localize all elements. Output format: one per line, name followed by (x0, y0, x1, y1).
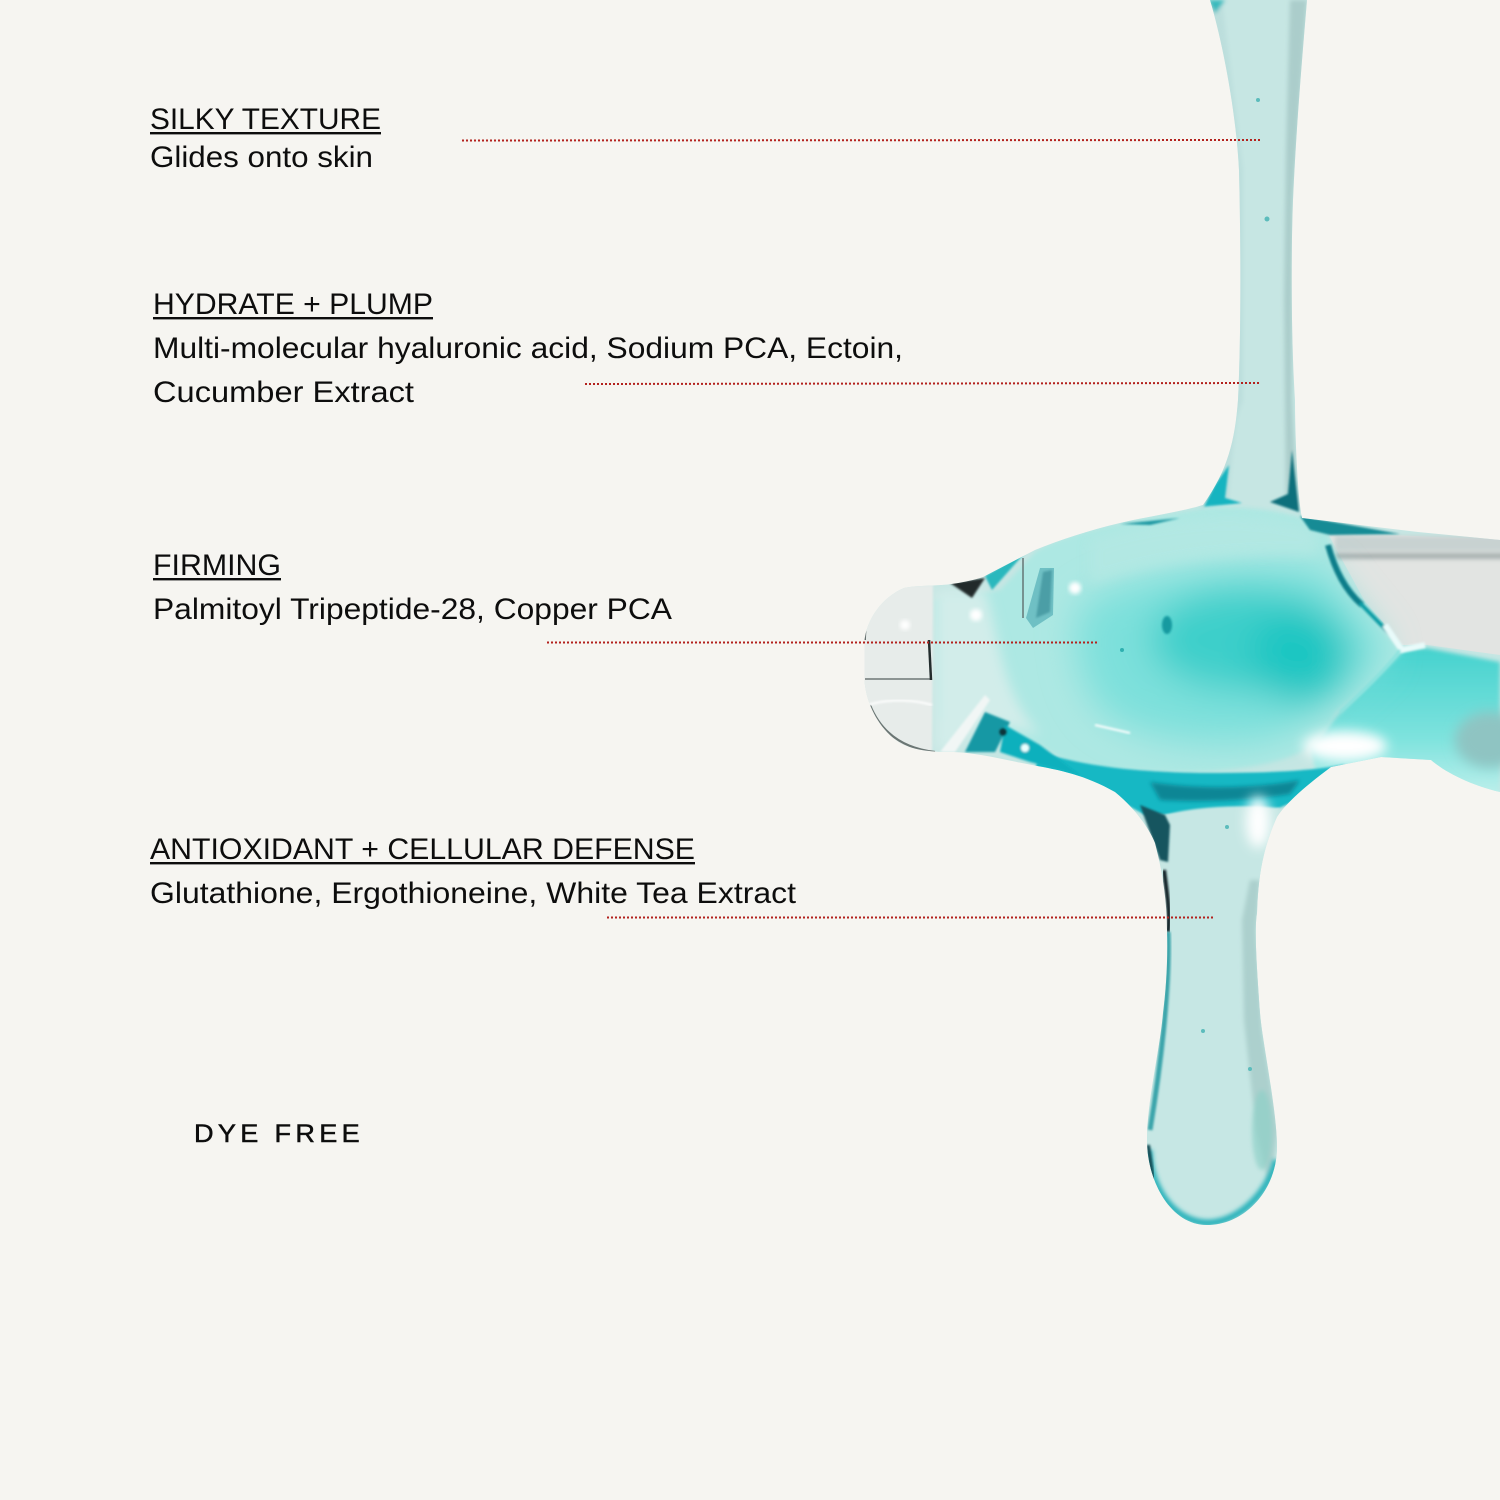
label: antioxidant + cellular defense (150, 833, 797, 910)
upper stem shading (1200, 0, 1307, 510)
label: hydrate + plump: Cucumber Extract (153, 376, 415, 409)
top-left shoulder wedges (984, 555, 1026, 591)
label: firming: FIRMING (153, 549, 281, 582)
highlights (1246, 731, 1387, 848)
specks (1201, 98, 1270, 1071)
lower stem shading (1242, 880, 1278, 1190)
stem base dark corners (1204, 450, 1299, 512)
gel base colour (850, 0, 1500, 1240)
bulb pale upper rim (1098, 542, 1308, 579)
image: dripping teal serum gel (850, 0, 1500, 1240)
label: dye free: DYE FREE (194, 1120, 364, 1148)
upper dark accents (1300, 516, 1400, 535)
clear right segment (1327, 532, 1500, 655)
embedded flake (1026, 568, 1054, 628)
leader line: silky texture (462, 139, 1260, 142)
leader line: antioxidant (607, 916, 1213, 918)
lower band (1035, 752, 1345, 815)
tip thin lines (865, 678, 930, 680)
right-bulb boundary dark edge (1328, 545, 1425, 712)
bubble (1162, 616, 1172, 634)
label: silky texture (150, 103, 381, 174)
leader line: hydrate + plump (585, 383, 1261, 384)
lower-left sparkling wedges (940, 695, 1080, 775)
label: hydrate + plump: Multi-molecular hyaluronic acid, Sodium PCA, Ectoin, (153, 332, 903, 365)
leader line: firming (547, 642, 1097, 644)
label: silky texture: SILKY TEXTURE (150, 103, 381, 136)
label: hydrate + plump (153, 288, 903, 409)
drop bottom rim (1149, 1150, 1276, 1223)
label: firming (153, 549, 672, 626)
bulb deep teal core (1076, 567, 1385, 743)
left neck (935, 590, 1040, 752)
lower stem (1156, 804, 1280, 1222)
label: antioxidant + cellular defense: Glutathione, Ergothioneine, White Tea Extract (150, 877, 797, 910)
label: silky texture: Glides onto skin (150, 141, 373, 174)
right lower teal limb (1310, 648, 1500, 800)
label: antioxidant + cellular defense: ANTIOXIDANT + CELLULAR DEFENSE (150, 833, 695, 866)
central bulb (935, 507, 1402, 772)
label: hydrate + plump: HYDRATE + PLUMP (153, 288, 433, 321)
left tip glass (860, 585, 933, 755)
label: firming: Palmitoyl Tripeptide-28, Copper PCA (153, 593, 672, 626)
